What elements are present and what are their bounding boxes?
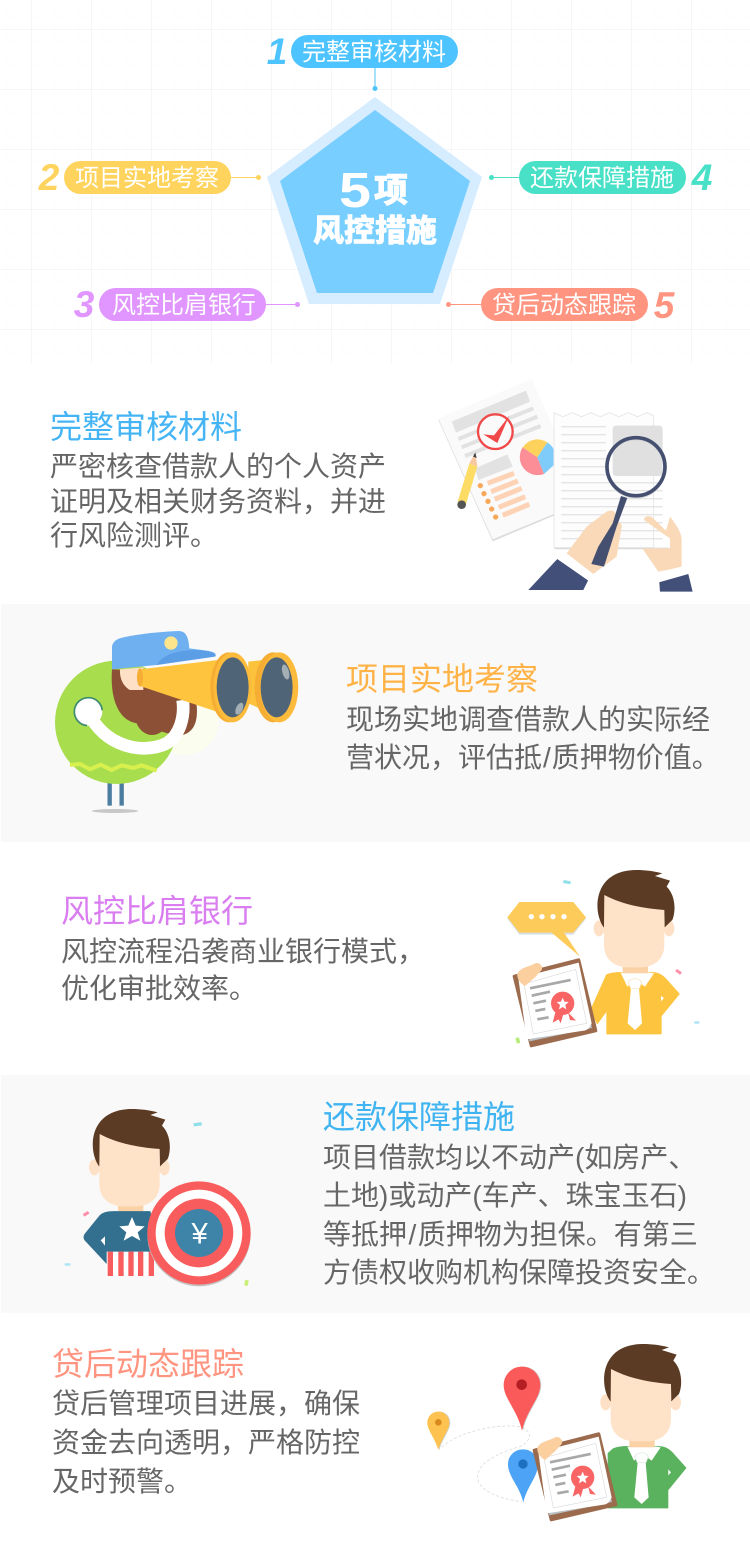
clipboard [514, 960, 596, 1046]
head [89, 1109, 170, 1212]
body 2: 营状况，评估抵/质押物价值。 [346, 742, 720, 773]
text block: section 4 [323, 1099, 715, 1288]
body 1 [50, 451, 386, 551]
body 3: 风控流程沿袭商业银行模式， [61, 936, 425, 967]
label 3 [74, 284, 300, 325]
label 4 [489, 157, 712, 198]
panel: top overview diagram [0, 0, 750, 364]
title digit 5: 5 [339, 164, 371, 218]
heading 4: 还款保障措施 [323, 1099, 515, 1135]
title character: 项 [374, 172, 408, 210]
heading 2: 项目实地考察 [346, 661, 538, 697]
green body [55, 661, 178, 784]
label 2 [38, 157, 261, 198]
heading 1: 完整审核材料 [50, 409, 242, 445]
blue shirt [84, 1212, 158, 1263]
blue pin [508, 1449, 538, 1503]
binoculars [137, 652, 298, 722]
illustration: map pins and green shirt man [427, 1344, 686, 1520]
confetti [65, 1122, 249, 1286]
illustration: captain man with shield [65, 1109, 251, 1286]
pill 1 [291, 35, 458, 68]
hand circle [73, 696, 103, 727]
pentagon: inner fill [280, 110, 470, 293]
body 1: 行风险测评。 [50, 520, 218, 551]
pill 1 text: 完整审核材料 [302, 39, 446, 66]
pill 3 text: 风控比肩银行 [112, 292, 256, 319]
left hand and sleeve [528, 510, 622, 590]
body 2 [346, 704, 720, 773]
star [119, 1217, 145, 1241]
shield [147, 1181, 251, 1286]
body 4 [323, 1142, 715, 1288]
text block: section 5 [52, 1346, 360, 1497]
body 5: 贷后管理项目进展，确保 [52, 1388, 360, 1419]
connector 4 [492, 176, 519, 178]
label 5 [446, 285, 676, 326]
body 4: 方债权收购机构保障投资安全。 [323, 1257, 715, 1288]
text block: section 2 [346, 661, 720, 773]
confetti [515, 880, 699, 1044]
connector dot 3 [295, 302, 300, 307]
red pin [504, 1367, 541, 1431]
face [120, 667, 143, 690]
number 1: 1 [267, 31, 287, 72]
connector dot 1 [372, 86, 378, 91]
certificate seal [551, 992, 576, 1023]
clipboard [534, 1434, 616, 1520]
title line: risk control measures: 风控措施 [313, 214, 437, 248]
magnifier [591, 438, 665, 567]
connector 1 [374, 68, 376, 88]
hat [112, 631, 216, 669]
hair [112, 669, 197, 736]
label 1 [267, 31, 458, 91]
right hand [642, 516, 693, 592]
grid background [0, 0, 750, 364]
pill 5 [481, 288, 648, 321]
body 5: 资金去向透明，严格防控 [52, 1427, 360, 1458]
ground shadow [92, 809, 138, 813]
collar and tie [621, 973, 664, 1030]
number 4: 4 [691, 157, 712, 198]
body 3 [61, 936, 425, 1004]
head [600, 1344, 681, 1447]
illustration: documents and magnifier [438, 379, 693, 592]
heading 3: 风控比肩银行 [61, 893, 253, 929]
panel: section 2 background [1, 604, 750, 842]
number 5: 5 [654, 285, 676, 326]
text block: section 1 [50, 409, 386, 551]
pentagon: outer ring [267, 97, 482, 304]
pill 3 [99, 288, 266, 321]
number 3: 3 [74, 284, 95, 325]
legs [110, 782, 122, 806]
pentagon title [313, 164, 437, 248]
body 4: 土地)或动产(车产、珠宝玉石) [323, 1180, 687, 1211]
yellow pin [427, 1412, 450, 1450]
shirt [591, 973, 679, 1034]
left paper [438, 379, 587, 541]
pill 4 text: 还款保障措施 [530, 165, 674, 192]
speech bubble [507, 902, 586, 957]
pill 2 [64, 161, 231, 194]
zigzag [70, 764, 157, 771]
striped shorts [107, 1252, 154, 1276]
connector dot 5 [446, 302, 451, 307]
pale glow [152, 688, 218, 755]
connector dot 2 [256, 175, 261, 180]
panel: section 4 background [1, 1075, 750, 1313]
receipt paper [554, 413, 669, 549]
green shirt [608, 1447, 686, 1508]
arm gap [101, 1236, 105, 1246]
body 4: 项目借款均以不动产(如房产、 [323, 1142, 696, 1173]
shield: ¥ [190, 1217, 208, 1250]
body 5 [52, 1388, 360, 1497]
connector dot 4 [489, 175, 494, 180]
connector 2 [231, 176, 258, 178]
body 1: 严密核查借款人的个人资产 [50, 451, 386, 482]
pill 4 [519, 161, 686, 194]
heading 5: 贷后动态跟踪 [52, 1346, 244, 1382]
text block: section 3 [61, 893, 425, 1004]
dashed route [442, 1426, 529, 1502]
red check badge [478, 414, 513, 449]
pill 2 text: 项目实地考察 [75, 165, 219, 192]
body 5: 及时预警。 [52, 1466, 192, 1497]
connector 3 [265, 304, 297, 306]
pie chart [520, 439, 556, 475]
illustration: yellow shirt man with certificate [507, 870, 699, 1046]
white arm [88, 700, 183, 748]
pill 5 text: 贷后动态跟踪 [492, 292, 636, 319]
illustration: person with binoculars [55, 631, 298, 813]
body 2: 现场实地调查借款人的实际经 [346, 704, 710, 735]
body 1: 证明及相关财务资料，并进 [50, 486, 386, 517]
connector 5 [449, 304, 481, 306]
collar and tie [627, 1447, 671, 1504]
head [594, 870, 674, 973]
body 3: 优化审批效率。 [61, 973, 257, 1004]
body 4: 等抵押/质押物为担保。有第三 [323, 1219, 698, 1250]
pencil [457, 452, 477, 509]
hand [517, 963, 542, 986]
number 2: 2 [38, 157, 60, 198]
